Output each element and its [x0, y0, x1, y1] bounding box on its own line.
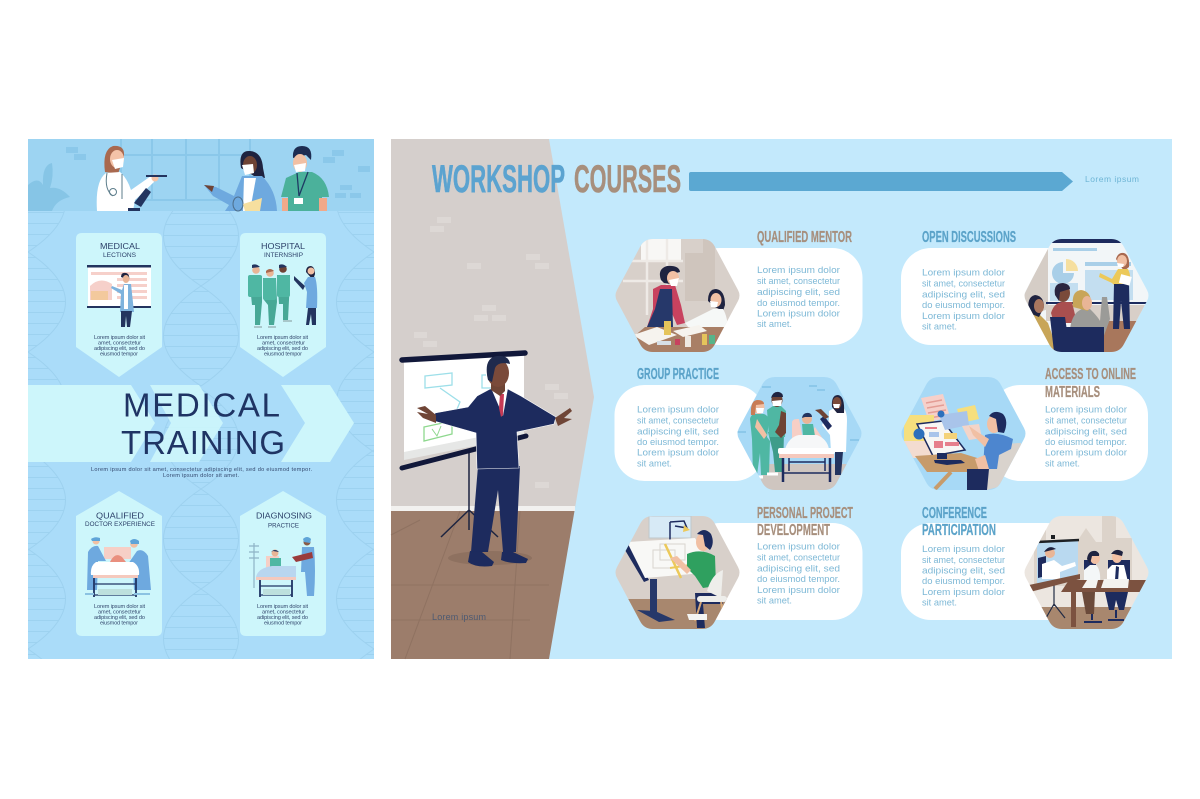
body text: Lorem ipsum dolor — [922, 311, 1005, 322]
illustration: nurses and doctor at bedside — [735, 377, 865, 490]
second nurse — [767, 392, 786, 472]
doctor — [815, 395, 847, 475]
illustration: video conference — [1022, 516, 1152, 629]
chair — [987, 443, 1021, 490]
body text: sit amet, consectetur — [757, 552, 840, 563]
body text: sit amet, consectetur — [1045, 415, 1127, 426]
body text: adipiscing elit, sed — [637, 426, 719, 437]
banner: arrow chevrons — [28, 385, 354, 462]
panel: workshop courses — [391, 139, 1172, 659]
card body text: Lorem ipsum dolor sit — [257, 335, 308, 341]
title: medical training: MEDICAL — [123, 386, 280, 424]
projection screen — [402, 353, 526, 537]
course: access to online materials — [899, 366, 1148, 490]
body text: adipiscing elit, sed — [922, 290, 1005, 300]
card body text: amet, consectetur — [262, 610, 305, 616]
body text: sit amet. — [757, 596, 792, 607]
body text: sit amet, consectetur — [922, 555, 1005, 566]
bed with child — [778, 413, 835, 482]
banner caption: Lorem ipsum dolor sit amet. — [163, 473, 239, 479]
icon: plant — [28, 163, 70, 211]
card body text: amet, consectetur — [262, 340, 305, 346]
card title: HOSPITAL — [261, 241, 305, 251]
card: qualified doctor experience: DOCTOR EXPERIENCE — [85, 521, 156, 528]
heading: PARTICIPATION — [922, 522, 996, 539]
body text: do eiusmod tempor. — [757, 298, 840, 309]
body text: do eiusmod tempor. — [637, 437, 719, 448]
body text: Lorem ipsum dolor — [637, 404, 719, 415]
body text — [922, 268, 1005, 332]
card: hospital internship — [240, 233, 326, 377]
body text: adipiscing elit, sed — [922, 565, 1005, 576]
heading: DEVELOPMENT — [757, 522, 830, 539]
card body text: amet, consectetur — [98, 340, 141, 346]
illustration: interns and doctor — [248, 264, 317, 327]
card body text: eiusmod tempor — [100, 620, 138, 626]
man — [983, 434, 1013, 469]
card: qualified doctor experience — [76, 491, 162, 636]
card body text: adipiscing elit, sed do — [257, 346, 308, 352]
body text: adipiscing elit, sed — [757, 287, 840, 298]
body text: adipiscing elit, sed — [757, 563, 840, 574]
first nurse — [750, 400, 770, 475]
course: personal project development — [613, 505, 862, 629]
body text: sit amet. — [1045, 459, 1080, 470]
title: workshop courses: WORKSHOP — [432, 158, 565, 201]
title: medical training: TRAINING — [121, 424, 285, 461]
card body text: amet, consectetur — [98, 610, 141, 616]
card: medical lections: LECTIONS — [103, 252, 137, 259]
title: workshop courses: COURSES — [574, 158, 681, 201]
doctor in blue coat — [204, 151, 277, 211]
body text: sit amet, consectetur — [757, 276, 840, 287]
course: qualified mentor — [613, 229, 862, 352]
body text — [757, 542, 840, 607]
body text: adipiscing elit, sed — [1045, 426, 1127, 437]
body text — [637, 404, 719, 470]
card body text — [94, 335, 145, 358]
heading — [1045, 366, 1136, 401]
body text: do eiusmod tempor. — [1045, 437, 1127, 448]
body text: sit amet. — [757, 319, 792, 330]
heading: CONFERENCE — [922, 505, 987, 522]
body text: do eiusmod tempor. — [922, 576, 1005, 587]
body text — [922, 544, 1005, 609]
course: group practice — [614, 366, 865, 490]
arrow caption: Lorem ipsum — [1085, 174, 1139, 184]
card body text: eiusmod tempor — [264, 620, 302, 626]
body text: Lorem ipsum dolor — [922, 544, 1005, 555]
body text: Lorem ipsum dolor — [757, 542, 840, 553]
scene caption: Lorem ipsum — [432, 612, 486, 622]
body text — [757, 265, 840, 330]
panel: medical training poster — [28, 139, 374, 659]
presenter man — [417, 356, 572, 566]
card body text: Lorem ipsum dolor sit — [257, 604, 308, 610]
banner caption: Lorem ipsum dolor sit amet, consectetur adipiscing elit, sed do eiusmod tempor. — [91, 467, 312, 473]
card body text: Lorem ipsum dolor sit — [94, 335, 145, 341]
heading: ACCESS TO ONLINE — [1045, 366, 1136, 383]
card body text: eiusmod tempor — [100, 352, 138, 358]
illustration: mentor and student — [613, 239, 743, 352]
heading: PERSONAL PROJECT — [757, 505, 853, 522]
body text: Lorem ipsum dolor — [757, 265, 840, 276]
heading: QUALIFIED MENTOR — [757, 229, 852, 246]
body text: sit amet. — [922, 322, 957, 332]
body text: Lorem ipsum dolor — [757, 585, 840, 596]
card body text: eiusmod tempor — [264, 352, 302, 358]
card: medical lections — [76, 233, 162, 377]
heading — [922, 505, 996, 539]
banner caption — [91, 467, 312, 479]
body text: Lorem ipsum dolor — [1045, 404, 1127, 415]
background: DNA pattern — [0, 152, 412, 749]
card body text: adipiscing elit, sed do — [94, 615, 145, 621]
card body text: adipiscing elit, sed do — [257, 615, 308, 621]
body text: Lorem ipsum dolor — [922, 268, 1005, 279]
arrow — [689, 172, 1073, 191]
doctor with clipboard — [97, 146, 167, 211]
heading: GROUP PRACTICE — [637, 366, 719, 383]
card title: MEDICAL — [100, 241, 140, 251]
body text — [1045, 404, 1127, 470]
heading: MATERIALS — [1045, 384, 1100, 401]
card: diagnosing practice — [240, 491, 326, 636]
body text: sit amet, consectetur — [922, 278, 1005, 290]
course: conference participation — [901, 505, 1152, 629]
header illustration: three doctors — [28, 139, 374, 211]
body text: sit amet. — [922, 598, 957, 609]
body text: Lorem ipsum dolor — [637, 448, 719, 459]
card body text — [94, 604, 145, 626]
card body text — [257, 604, 308, 626]
illustration: patient in bed — [249, 537, 315, 597]
card: diagnosing practice: PRACTICE — [268, 522, 300, 530]
card body text: Lorem ipsum dolor sit — [94, 604, 145, 610]
heading: OPEN DISCUSSIONS — [922, 229, 1016, 246]
illustration: man at computer — [899, 377, 1029, 490]
body text: sit amet. — [637, 459, 672, 470]
card body text: adipiscing elit, sed do — [94, 346, 145, 352]
card: hospital internship: INTERNSHIP — [264, 252, 303, 259]
body text: Lorem ipsum dolor — [922, 587, 1005, 598]
doctor in green scrubs — [281, 146, 329, 211]
card title: DIAGNOSING — [256, 510, 312, 520]
body text: sit amet, consectetur — [637, 415, 719, 426]
body text: Lorem ipsum dolor — [1045, 448, 1127, 459]
illustration: presentation audience — [1022, 239, 1152, 352]
illustration: drafting at a table — [613, 516, 743, 629]
body text: Lorem ipsum dolor — [757, 308, 840, 320]
illustration: lecturer at board — [87, 265, 151, 327]
course: open discussions — [901, 229, 1152, 352]
heading — [757, 505, 853, 539]
body text: do eiusmod tempor. — [757, 574, 840, 585]
card title: QUALIFIED — [96, 510, 144, 520]
title: medical training — [121, 386, 285, 461]
body text: do eiusmod tempor. — [922, 300, 1005, 311]
card body text — [257, 335, 308, 358]
presenter scene — [391, 139, 594, 659]
illustration: surgery — [85, 537, 151, 597]
